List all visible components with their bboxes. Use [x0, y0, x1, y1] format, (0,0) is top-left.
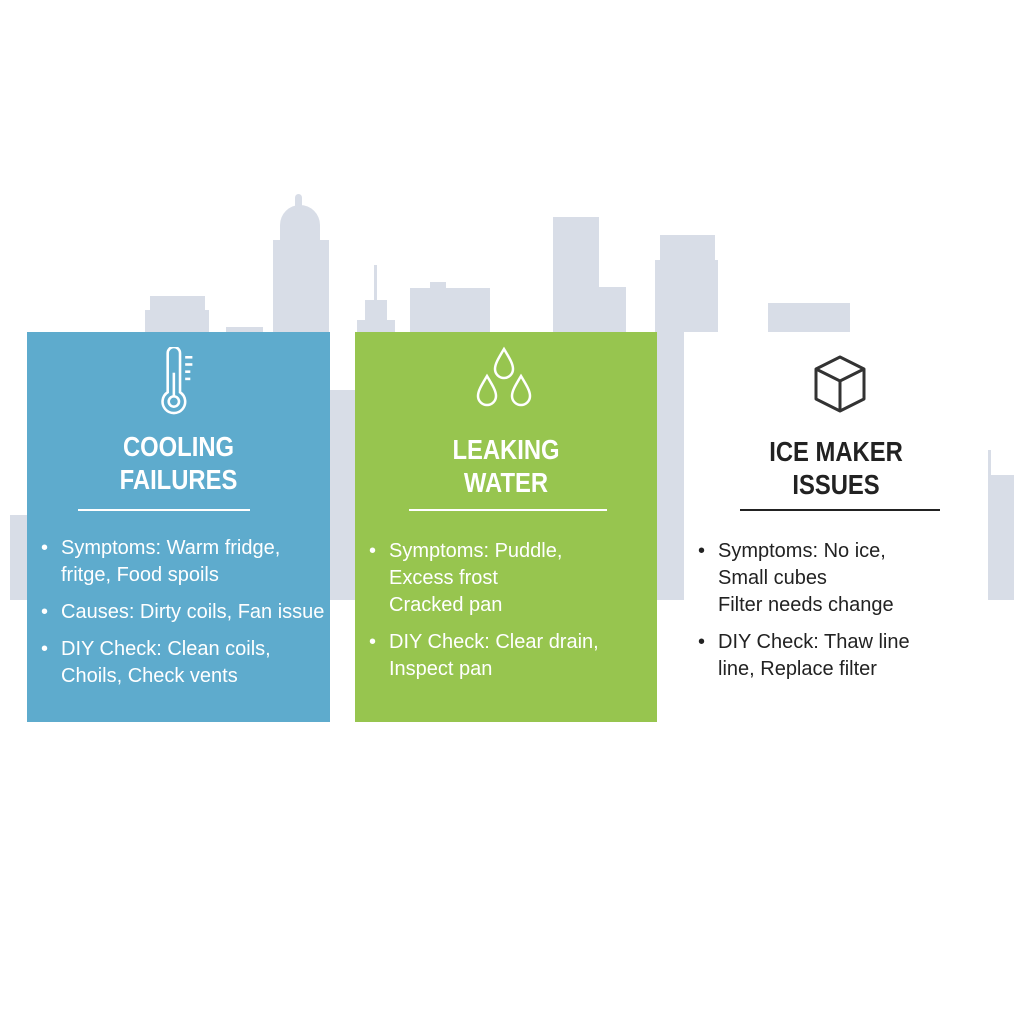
heading: LEAKING	[452, 434, 560, 465]
icon: ice cube	[814, 356, 866, 412]
icon: thermometer	[161, 347, 192, 414]
heading: COOLING	[123, 431, 234, 462]
bullet list	[370, 540, 599, 680]
panel: cooling failures	[27, 332, 330, 722]
panel: ice maker issues	[684, 332, 988, 722]
heading: WATER	[464, 467, 548, 498]
bullet list: Symptoms: Puddle,	[389, 540, 562, 562]
icon: water drops	[476, 346, 532, 406]
bullet list	[42, 537, 324, 687]
bullet list: Filter needs change	[718, 594, 894, 616]
heading: ISSUES	[792, 469, 880, 500]
bullet list: Small cubes	[718, 567, 827, 589]
bullet list: Cracked pan	[389, 594, 502, 616]
bullet list: DIY Check: Thaw line	[718, 631, 910, 653]
bullet list: Symptoms: Warm fridge,	[61, 537, 280, 559]
bullet list: DIY Check: Clear drain,	[389, 631, 599, 653]
bullet list: Excess frost	[389, 567, 498, 589]
bullet list: DIY Check: Clean coils,	[61, 638, 271, 660]
bullet list: Choils, Check vents	[61, 665, 238, 687]
bullet list: Causes: Dirty coils, Fan issue	[61, 601, 324, 623]
bullet list: line, Replace filter	[718, 658, 877, 680]
bullet list: Symptoms: No ice,	[718, 540, 886, 562]
bullet list	[698, 540, 910, 680]
heading: ICE MAKER	[769, 436, 903, 467]
bullet list: fritge, Food spoils	[61, 564, 219, 586]
bullet list: Inspect pan	[389, 658, 492, 680]
panel: leaking water	[355, 332, 657, 722]
heading	[769, 436, 903, 500]
heading	[452, 434, 560, 498]
heading	[120, 431, 237, 495]
heading: FAILURES	[120, 464, 237, 495]
